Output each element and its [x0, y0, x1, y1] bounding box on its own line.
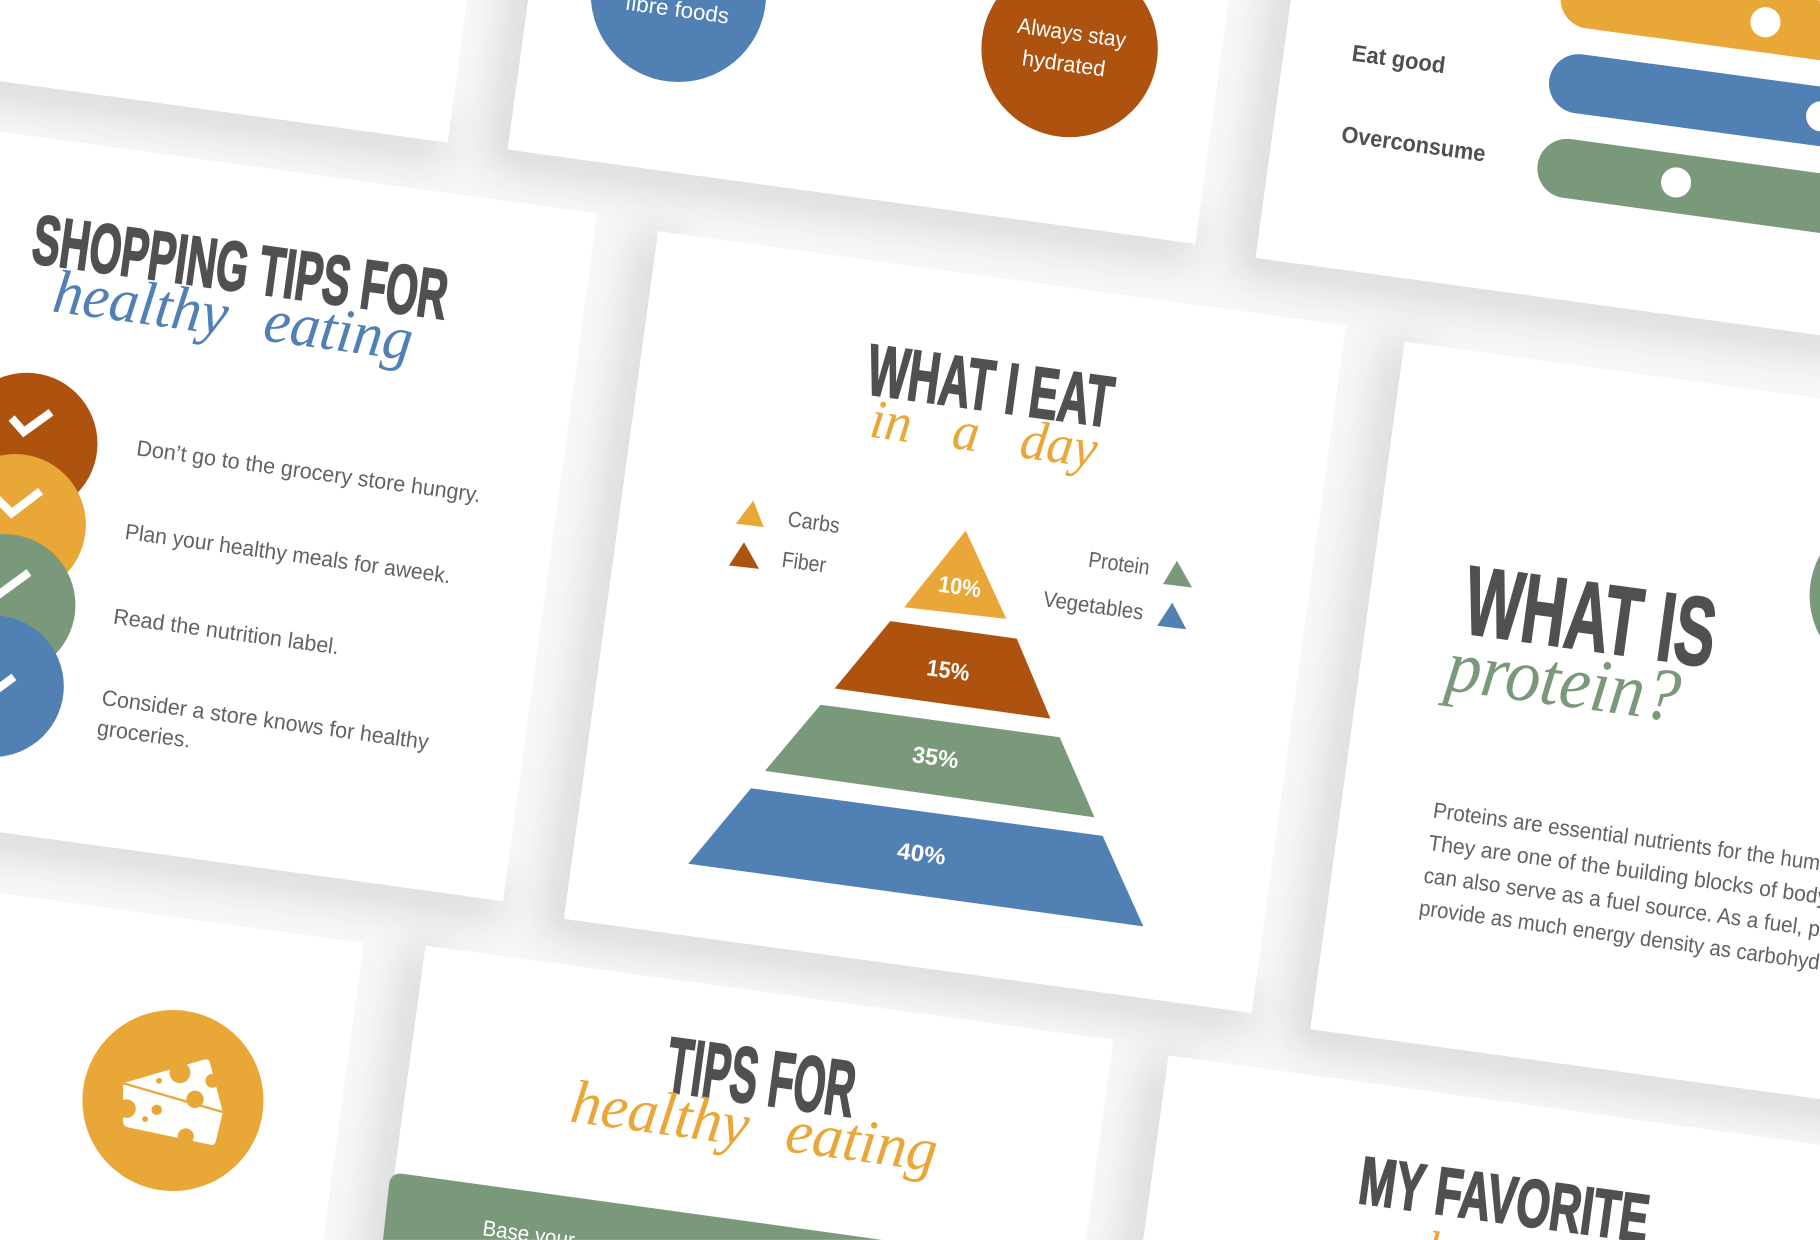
heading: shopping tips for: SHOPPING TIPS FOR: [28, 200, 453, 334]
tier: 15%: 15%: [925, 654, 972, 686]
slider: green: [1567, 167, 1820, 224]
script heading: protein?: protein?: [1437, 624, 1685, 738]
tier: 40%: [688, 788, 1143, 926]
script heading: in a day: in a day: [866, 389, 1102, 480]
label: eat good: Eat good: [1350, 40, 1447, 78]
slider: blue: [1579, 84, 1820, 137]
panel: eating sliders: [1340, 0, 1820, 224]
tip text list: [96, 435, 482, 754]
icon: cheese: [117, 1059, 223, 1145]
legend: carbs: [736, 500, 841, 538]
legend: vegetables: Vegetables: [1042, 586, 1145, 625]
tier: 35%: 35%: [911, 741, 961, 773]
panel: what is protein: [1418, 512, 1820, 981]
tip text list: groceries.: [96, 715, 192, 753]
heading: what I eat: WHAT I EAT: [863, 330, 1118, 443]
green tip panel: [383, 1174, 882, 1240]
panel: cheese icon: [82, 1010, 263, 1191]
tip text list: Consider a store knows for healthy: [100, 685, 430, 754]
tier: 10%: 10%: [937, 571, 983, 602]
check circle: brown: [0, 373, 98, 514]
heading: tips for: TIPS FOR: [662, 1021, 861, 1134]
tip text list: Don’t go to the grocery store hungry.: [135, 435, 482, 507]
script heading: healthy eating: healthy eating: [567, 1067, 942, 1185]
tier: 10%: [904, 531, 1006, 619]
pyramid chart: [688, 531, 1143, 926]
check circle: blue: [0, 615, 64, 757]
circle: always stay hydrated: hydrated: [1021, 45, 1107, 81]
tier: 35%: [765, 705, 1095, 817]
label: overconsume: Overconsume: [1340, 121, 1487, 166]
legend: protein: [1087, 547, 1192, 588]
legend: protein: Protein: [1087, 547, 1151, 580]
protein paragraph: [1418, 798, 1820, 981]
tip text list: Read the nutrition label.: [112, 604, 341, 659]
tier: 15%: [835, 621, 1050, 719]
panel: shopping tips: [0, 200, 482, 757]
legend: fiber: Fiber: [780, 547, 828, 578]
decorative green circle: [1810, 512, 1820, 679]
panel: my favorite: [1355, 1143, 1654, 1240]
circle: fibre foods: [591, 0, 766, 82]
panel: what I eat in a day: [688, 330, 1192, 926]
check circle: orange: [0, 454, 86, 596]
check circle: green: [0, 534, 75, 676]
tip text list: Plan your healthy meals for aweek.: [124, 519, 452, 588]
circle: always stay hydrated: Always stay: [1016, 13, 1128, 52]
circle: always stay hydrated: [981, 0, 1158, 137]
panel: tips for healthy eating: [383, 1021, 942, 1240]
legend: carbs: Carbs: [786, 506, 841, 538]
orange circle: [82, 1010, 263, 1191]
tier: 40%: 40%: [896, 837, 948, 870]
panel: hydration tips: [591, 0, 1158, 137]
legend: fiber: [729, 542, 828, 578]
script heading: healthy eating: healthy eating: [49, 257, 417, 374]
slider: orange: [1590, 0, 1820, 51]
